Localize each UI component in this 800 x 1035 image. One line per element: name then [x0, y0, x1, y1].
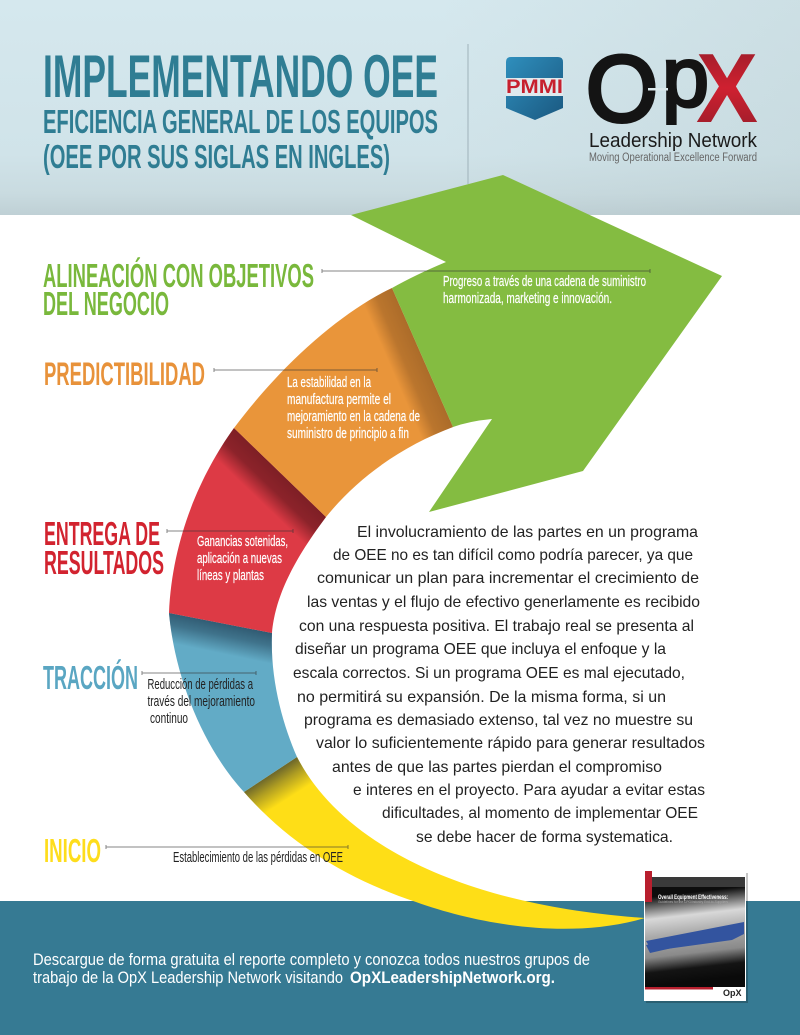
icon: OpX Leadership Network logo: Moving Operational Excellence Forward: [589, 152, 757, 164]
text block: main body paragraph: El involucramiento de las partes en un programa: [357, 524, 698, 541]
text block: main body paragraph: comunicar un plan para incrementar el crecimiento de: [317, 570, 699, 587]
arrow head: green alineacion: [351, 175, 722, 512]
text block: alineacion description: harmonizada, marketing e innovación.: [443, 291, 612, 307]
heading: main title: EFICIENCIA GENERAL DE LOS EQUIPOS: [43, 103, 438, 140]
icon: OpX Leadership Network logo: X: [696, 33, 758, 143]
leader line: entrega: [167, 529, 293, 533]
text block: main body paragraph: e interes en el proyecto. Para ayudar a evitar estas: [353, 782, 705, 799]
text block: main body paragraph: las ventas y el flujo de efectivo generlamente es recibido: [307, 594, 700, 611]
text block: main body paragraph: se debe hacer de forma systematica.: [416, 829, 673, 846]
icon: OpX Leadership Network logo: O: [586, 36, 658, 141]
panel: footer band: [0, 901, 800, 1035]
report cover thumbnail: [644, 871, 748, 1003]
text block: predictibilidad description: [287, 375, 420, 442]
heading: alineacion con objetivos: DEL NEGOCIO: [43, 285, 169, 322]
text block: predictibilidad description: mejoramiento en la cadena de: [287, 409, 420, 425]
heading: entrega de resultados: ENTREGA DE: [44, 515, 160, 552]
heading: traccion: TRACCIÓN: [43, 659, 138, 696]
text block: traccion description: través del mejoramiento: [148, 694, 255, 710]
icon: OpX Leadership Network logo: Leadership Network: [589, 130, 758, 152]
arrow segment: blue traccion: [169, 613, 297, 792]
report cover thumbnail: Overall Equipment Effectiveness:: [658, 895, 728, 901]
text block: entrega description: líneas y plantas: [197, 568, 264, 584]
icon: OpX Leadership Network logo: p: [662, 30, 709, 124]
text block: main body paragraph: valor lo suficientemente rápido para generar resultados: [316, 735, 705, 752]
heading: entrega de resultados: [44, 515, 164, 581]
panel: header background: [0, 0, 800, 215]
text block: main body paragraph: no permitirá su expansión. De la misma forma, si un: [297, 689, 666, 706]
text block: entrega description: [197, 534, 288, 584]
text block: footer call to action: trabajo de la OpX Leadership Network visitando: [33, 969, 343, 987]
heading: entrega de resultados: RESULTADOS: [44, 544, 164, 581]
icon: PMMI shield logo: [506, 57, 563, 120]
text block: main body paragraph: antes de que las partes pierdan el compromiso: [332, 759, 662, 776]
heading: main title: (OEE POR SUS SIGLAS EN INGLES): [43, 138, 390, 175]
arrow segment: yellow inicio: [244, 757, 645, 929]
text block: alineacion description: Progreso a través de una cadena de suministro: [443, 274, 646, 290]
leader line: traccion: [142, 671, 256, 675]
text block: traccion description: Reducción de pérdidas a: [148, 677, 254, 693]
report cover thumbnail: Guidelines for the CPG/Industry End-to-Suppliers: [658, 900, 728, 904]
leader line: alineacion: [322, 269, 650, 273]
text block: main body paragraph: dificultades, al momento de implementar OEE: [382, 805, 698, 822]
text block: main body paragraph: [293, 524, 705, 846]
arrow segment: red entrega: [169, 428, 326, 633]
heading: alineacion con objetivos: ALINEACIÓN CON OBJETIVOS: [43, 257, 314, 294]
text block: main body paragraph: de OEE no es tan difícil como podría parecer, ya que: [333, 547, 693, 564]
arrow segment: orange predictibilidad: [234, 288, 453, 517]
text block: predictibilidad description: manufactura permite el: [287, 392, 391, 408]
icon: PMMI shield logo: PMMI: [506, 77, 563, 98]
text block: footer call to action: OpXLeadershipNetwork.org.: [350, 969, 555, 987]
text block: footer call to action: [33, 951, 590, 987]
text block: traccion description: [148, 677, 255, 727]
heading: main title: IMPLEMENTANDO OEE: [43, 43, 438, 110]
text block: main body paragraph: escala correctos. Si un programa OEE es mal ejecutado,: [293, 665, 685, 682]
text block: entrega description: Ganancias sotenidas,: [197, 534, 288, 550]
report cover thumbnail: OpX: [723, 988, 742, 998]
text block: footer call to action: Descargue de forma gratuita el reporte completo y conozca todos nuestros grupos de: [33, 951, 590, 969]
text block: inicio description: Establecimiento de las pérdidas en OEE: [173, 850, 343, 866]
heading: main title: [43, 43, 438, 175]
text block: traccion description: continuo: [150, 711, 188, 727]
text block: alineacion description: [443, 274, 646, 307]
text block: predictibilidad description: La estabilidad en la: [287, 375, 372, 391]
header divider: [468, 44, 469, 184]
heading: alineacion con objetivos: [43, 257, 314, 322]
heading: predictibilidad: PREDICTIBILIDAD: [44, 356, 205, 392]
text block: main body paragraph: con una respuesta positiva. El trabajo real se presenta al: [299, 618, 694, 635]
icon: OpX Leadership Network logo: [586, 30, 758, 164]
leader line: inicio: [106, 845, 348, 849]
text block: predictibilidad description: suministro de principio a fin: [287, 426, 409, 442]
text block: main body paragraph: programa es demasiado extenso, tal vez no muestre su: [304, 712, 693, 729]
text block: main body paragraph: diseñar un programa OEE que incluya el enfoque y la: [295, 641, 666, 658]
text block: entrega description: aplicación a nuevas: [197, 551, 282, 567]
heading: inicio: INICIO: [44, 832, 101, 869]
leader line: predictibilidad: [214, 368, 377, 372]
